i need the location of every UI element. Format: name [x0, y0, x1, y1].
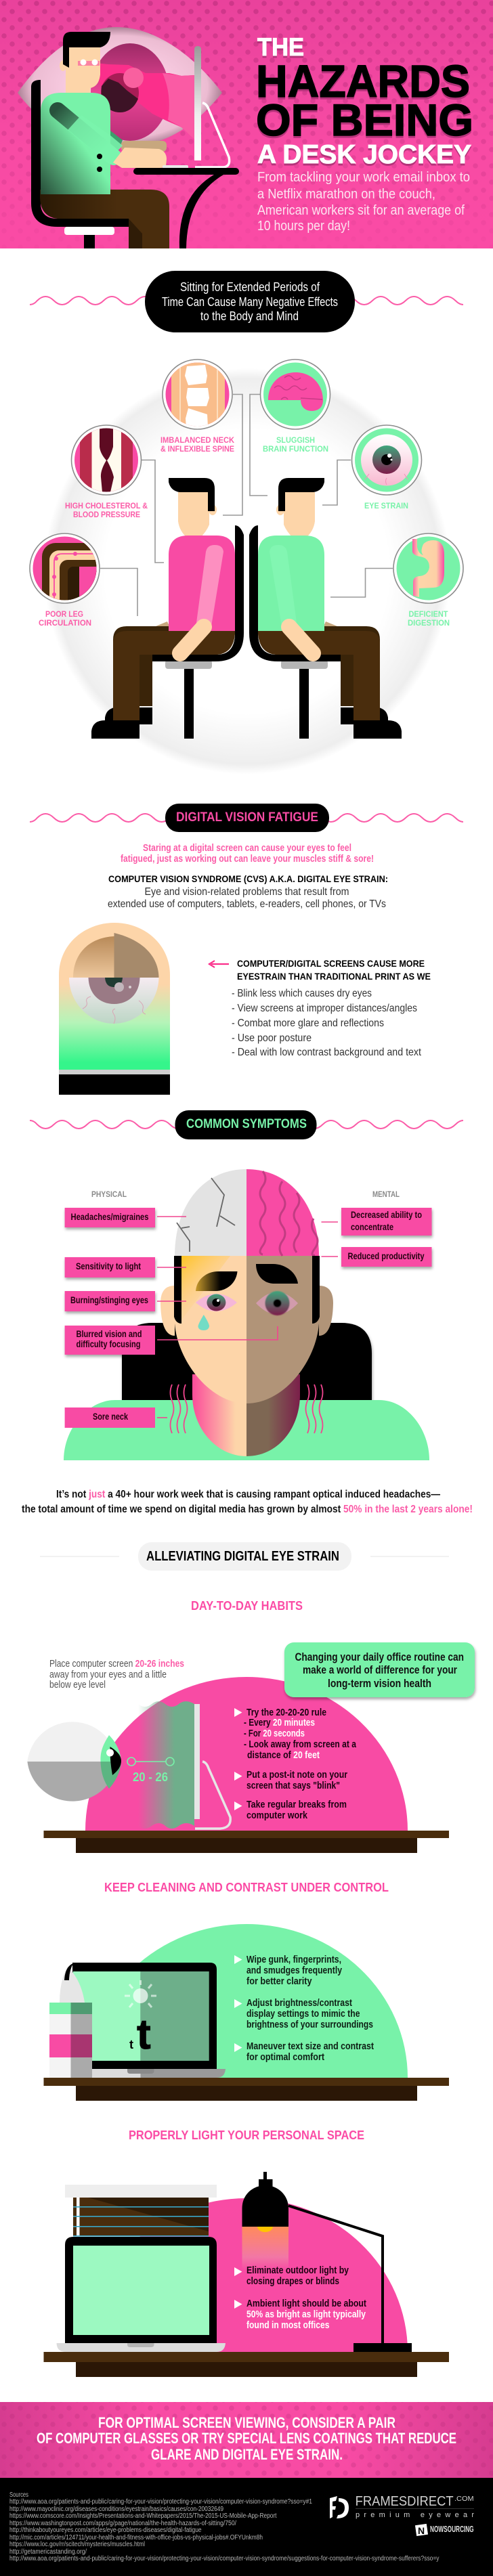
subtitle: American workers sit for an average of	[257, 202, 465, 218]
heading pill: sitting effects: to the Body and Mind	[200, 309, 299, 323]
text: digital screens list: - Combat more glare and reflections	[232, 1018, 384, 1029]
icon: blood vessel	[70, 424, 142, 496]
symptom: productivity: Reduced productivity	[348, 1250, 425, 1261]
list: cleaning tips: brightness of your surroundings	[246, 2019, 373, 2030]
heading pill: digital vision fatigue: DIGITAL VISION FATIGUE	[176, 810, 318, 825]
logo: FramesDirect	[330, 2494, 474, 2519]
callout: daily routine	[284, 1642, 475, 1697]
wave dividers: intro	[30, 297, 463, 305]
subtitle: From tackling your work email inbox to	[257, 169, 470, 185]
symptom: sore neck: Sore neck	[93, 1411, 128, 1422]
label: cholesterol	[65, 502, 148, 519]
heading pill: common symptoms	[175, 1110, 317, 1139]
illustration: cleaning spray bottle	[49, 1963, 92, 2078]
wave dividers: symptoms	[30, 1120, 463, 1129]
figure: right seated man	[249, 478, 402, 739]
label: brain: BRAIN FUNCTION	[263, 445, 328, 454]
list: habits: - For 20 seconds	[244, 1728, 305, 1739]
sources: http://mic.com/articles/124711/your-health-and-fitness-with-office-jobs-vs-physical-jobs#.OFYUnkm8h	[9, 2534, 263, 2541]
subheading: personal lighting: PROPERLY LIGHT YOUR PERSONAL SPACE	[129, 2128, 364, 2142]
text: staring callout: fatigued, just as working out can leave your muscles stiff & sore!	[121, 854, 374, 865]
panel: body effects	[30, 359, 463, 774]
text: digital screens list: - Use poor posture	[232, 1032, 312, 1044]
panel: header	[0, 0, 493, 248]
subheading: day-to-day habits: DAY-TO-DAY HABITS	[191, 1598, 303, 1613]
illustration: desk lamp	[242, 2172, 412, 2352]
label: cholesterol: BLOOD PRESSURE	[73, 511, 140, 519]
list: habits: computer work	[246, 1810, 308, 1821]
symptom: sensitivity	[65, 1257, 155, 1278]
text: CVS definition: extended use of computers, tablets, e-readers, cell phones, or TVs	[108, 898, 386, 910]
logo: FramesDirect: FRAMESDIRECT	[356, 2494, 454, 2509]
illustration: man at desk with giant eye	[18, 27, 239, 248]
panel: cleaning and contrast	[43, 1924, 449, 2101]
text: digital screens list	[232, 958, 431, 1058]
list: habits: - Look away from screen at a	[244, 1739, 357, 1750]
label: digestion	[408, 611, 450, 628]
symptom: concentrate	[341, 1208, 432, 1236]
illustration: head and eye	[27, 1722, 121, 1802]
symptom: sensitivity: Sensitivity to light	[76, 1261, 141, 1271]
subtitle	[257, 169, 470, 234]
text: digital media statistic: the total amount of time we spend on digital media has grown by almost 50% in the last 2 years alone!	[22, 1504, 473, 1515]
list: habits: Try the 20-20-20 rule	[246, 1707, 326, 1718]
list: habits	[234, 1707, 357, 1821]
list: cleaning tips: and smudges frequently	[246, 1965, 343, 1976]
symptom: blurred vision: difficulty focusing	[76, 1338, 141, 1349]
text: digital screens list: - Deal with low contrast background and text	[232, 1047, 421, 1058]
label: brain: SLUGGISH	[276, 437, 315, 445]
symptom: sore neck	[65, 1407, 155, 1428]
logo: NowSourcing: N	[418, 2525, 425, 2536]
list: lighting tips: Eliminate outdoor light by	[246, 2265, 349, 2276]
connector lines	[100, 394, 393, 616]
symptom: blurred vision: Blurred vision and	[76, 1328, 142, 1339]
panel: computer glasses banner	[0, 2402, 493, 2478]
symptom: burning: Burning/stinging eyes	[70, 1294, 148, 1305]
desk	[43, 2352, 449, 2377]
heading pill: common symptoms: COMMON SYMPTOMS	[186, 1117, 307, 1131]
symptom: blurred vision	[65, 1326, 155, 1355]
desk	[43, 2078, 449, 2101]
list: cleaning tips: Maneuver text size and contrast	[246, 2040, 374, 2052]
panel: day-to-day habits	[27, 1642, 475, 1853]
sources: https://www.comscore.com/Insights/Presentations-and-Whitepapers/2015/The-2015-US-Mobile-App-Report	[9, 2512, 277, 2520]
heading pill: sitting effects: Time Can Cause Many Negative Effects	[162, 295, 338, 309]
text: CVS definition	[108, 874, 388, 910]
heading pill: sitting effects	[145, 271, 355, 332]
label: cholesterol: HIGH CHOLESTEROL &	[65, 502, 148, 510]
text: screen placement: below eye level	[49, 1680, 106, 1690]
subtitle: a Netflix marathon on the couch,	[257, 186, 435, 202]
icon: leg circulation	[29, 533, 100, 604]
text: CVS definition: Eye and vision-related problems that result from	[145, 886, 349, 898]
pink arch	[85, 2198, 408, 2352]
illustration: laptop	[57, 2237, 226, 2352]
symptom: headaches	[65, 1208, 155, 1227]
heading pill: alleviating digital eye strain	[40, 1542, 449, 1571]
text: digital screens list: - Blink less which causes dry eyes	[232, 988, 372, 999]
list: habits: Put a post-it note on your	[246, 1769, 347, 1781]
heading pill: digital vision fatigue	[165, 804, 329, 832]
illustration: tired eye on screen	[59, 923, 170, 1095]
label: neck and spine: IMBALANCED NECK	[160, 437, 235, 445]
heading pill: alleviating digital eye strain: ALLEVIATING DIGITAL EYE STRAIN	[146, 1549, 339, 1564]
list: habits: - Every 20 minutes	[244, 1717, 315, 1728]
label: circulation	[39, 611, 91, 628]
title: HAZARDS	[256, 56, 470, 107]
symptom: concentrate: Decreased ability to	[351, 1209, 422, 1220]
sources: https://www.washingtonpost.com/apps/g/page/national/the-health-hazards-of-sitting/750/	[9, 2520, 236, 2527]
subheading: cleaning and contrast: KEEP CLEANING AND CONTRAST UNDER CONTROL	[104, 1880, 389, 1894]
green arch	[85, 1924, 408, 2078]
sources: Sources	[9, 2491, 28, 2499]
label: physical: PHYSICAL	[91, 1191, 127, 1199]
text size sample	[129, 2011, 151, 2058]
text size sample: t	[129, 2038, 133, 2051]
list: lighting tips: 50% as bright as light typically	[246, 2309, 366, 2320]
label: digestion: DEFICIENT	[409, 611, 448, 619]
title	[256, 33, 473, 169]
icon: sun glare	[125, 1980, 156, 2007]
icon: brain	[260, 359, 330, 429]
list: lighting tips	[234, 2265, 366, 2331]
distance marker: 20-26: 20 - 26	[133, 1770, 168, 1784]
text: digital media statistic: It’s not just a 40+ hour work week that is causing rampant optical induced headaches—	[56, 1489, 440, 1500]
list: lighting tips: Ambient light should be about	[246, 2298, 366, 2309]
title: A DESK JOCKEY	[257, 140, 471, 169]
symptom: concentrate: concentrate	[351, 1221, 393, 1232]
symptom: burning	[65, 1291, 155, 1311]
panel: computer glasses banner: FOR OPTIMAL SCREEN VIEWING, CONSIDER A PAIR	[98, 2414, 395, 2431]
text: digital screens list: EYESTRAIN THAN TRADITIONAL PRINT AS WE	[237, 971, 431, 982]
label: neck and spine	[160, 437, 235, 454]
panel: lighting	[43, 2172, 449, 2377]
desk	[43, 1831, 449, 1853]
list: cleaning tips: for better clarity	[246, 1975, 312, 1987]
label: eye strain: EYE STRAIN	[364, 502, 408, 510]
text size sample: t	[137, 2011, 151, 2058]
title: OF BEING	[256, 95, 473, 145]
label: neck and spine: & INFLEXIBLE SPINE	[160, 445, 234, 454]
sources: http://getamericastanding.org/	[9, 2548, 87, 2556]
label: digestion: DIGESTION	[408, 619, 450, 628]
sources: http://thinkaboutyoureyes.com/articles/eye-problems-diseases/digital-fatigue	[9, 2527, 202, 2534]
text: staring callout: Staring at a digital screen can cause your eyes to feel	[143, 843, 351, 854]
pink arch	[85, 1677, 408, 1831]
list: cleaning tips: Adjust brightness/contrast	[246, 1997, 352, 2009]
subtitle: 10 hours per day!	[257, 218, 350, 234]
logo: NowSourcing	[415, 2524, 474, 2536]
panel: computer glasses banner: GLARE AND DIGITAL EYE STRAIN.	[151, 2446, 343, 2463]
illustration: laptop	[72, 1963, 226, 2078]
icon: spine	[163, 359, 233, 431]
symptom: productivity	[341, 1247, 432, 1267]
text: digital media statistic	[22, 1489, 473, 1515]
list: cleaning tips: Wipe gunk, fingerprints,	[246, 1954, 341, 1965]
icon: strained eye	[352, 425, 421, 495]
sources: http://www.aoa.org/patients-and-public/caring-for-your-vision/protecting-your-vision/computer-vision-syndrome?sso=y#1	[9, 2498, 312, 2506]
text: digital screens list: COMPUTER/DIGITAL SCREENS CAUSE MORE	[237, 958, 425, 969]
panel: symptoms head	[64, 1169, 432, 1460]
callout: daily routine: make a world of difference for your	[303, 1663, 457, 1676]
list: cleaning tips	[234, 1954, 374, 2063]
sources	[9, 2491, 439, 2562]
list: habits: distance of 20 feet	[247, 1749, 320, 1761]
label: mental: MENTAL	[372, 1191, 400, 1199]
heading pill: sitting effects: Sitting for Extended Periods of	[180, 280, 320, 294]
text: screen placement: away from your eyes and a little	[49, 1669, 167, 1680]
text: screen placement	[49, 1659, 184, 1690]
callout: daily routine: long-term vision health	[328, 1677, 431, 1690]
list: cleaning tips: display settings to mimic the	[246, 2008, 360, 2020]
text: digital screens list: - View screens at improper distances/angles	[232, 1003, 417, 1014]
label lines	[157, 1217, 338, 1418]
label: circulation: POOR LEG	[45, 611, 83, 619]
list: lighting tips: closing drapes or blinds	[246, 2275, 339, 2287]
figure: left seated man	[91, 478, 244, 739]
illustration: monitor with glow	[138, 1701, 230, 1829]
text: staring callout	[121, 843, 374, 865]
list: cleaning tips: for optimal comfort	[246, 2051, 324, 2063]
list: habits: Take regular breaks from	[246, 1799, 347, 1810]
title: THE	[257, 33, 304, 61]
illustration: window blinds	[65, 2185, 217, 2237]
logo: FramesDirect: premium eyewear	[356, 2511, 474, 2519]
arrow: pink left	[209, 961, 229, 967]
list: lighting tips: found in most offices	[246, 2319, 329, 2331]
label: brain	[263, 437, 328, 454]
illustration: split head	[64, 1169, 429, 1460]
logo: FramesDirect: .COM	[454, 2495, 474, 2503]
icon: stomach	[393, 533, 463, 603]
panel: footer	[0, 2478, 493, 2576]
sources: http://www.mayoclinic.org/diseases-conditions/eyestrain/basics/causes/con-20032649	[9, 2506, 223, 2513]
distance marker: 20-26	[127, 1758, 174, 1784]
label: circulation: CIRCULATION	[39, 619, 91, 628]
sources: https://www.loc.gov/rr/scitech/mysteries/muscles.html	[9, 2541, 145, 2548]
text: CVS definition: COMPUTER VISION SYNDROME (CVS) A.K.A. DIGITAL EYE STRAIN:	[108, 874, 388, 884]
text: screen placement: Place computer screen 20-26 inches	[49, 1659, 184, 1669]
list: habits: screen that says "blink"	[246, 1780, 340, 1791]
wave dividers: digital vision	[30, 814, 463, 822]
symptom: headaches: Headaches/migraines	[70, 1211, 149, 1222]
